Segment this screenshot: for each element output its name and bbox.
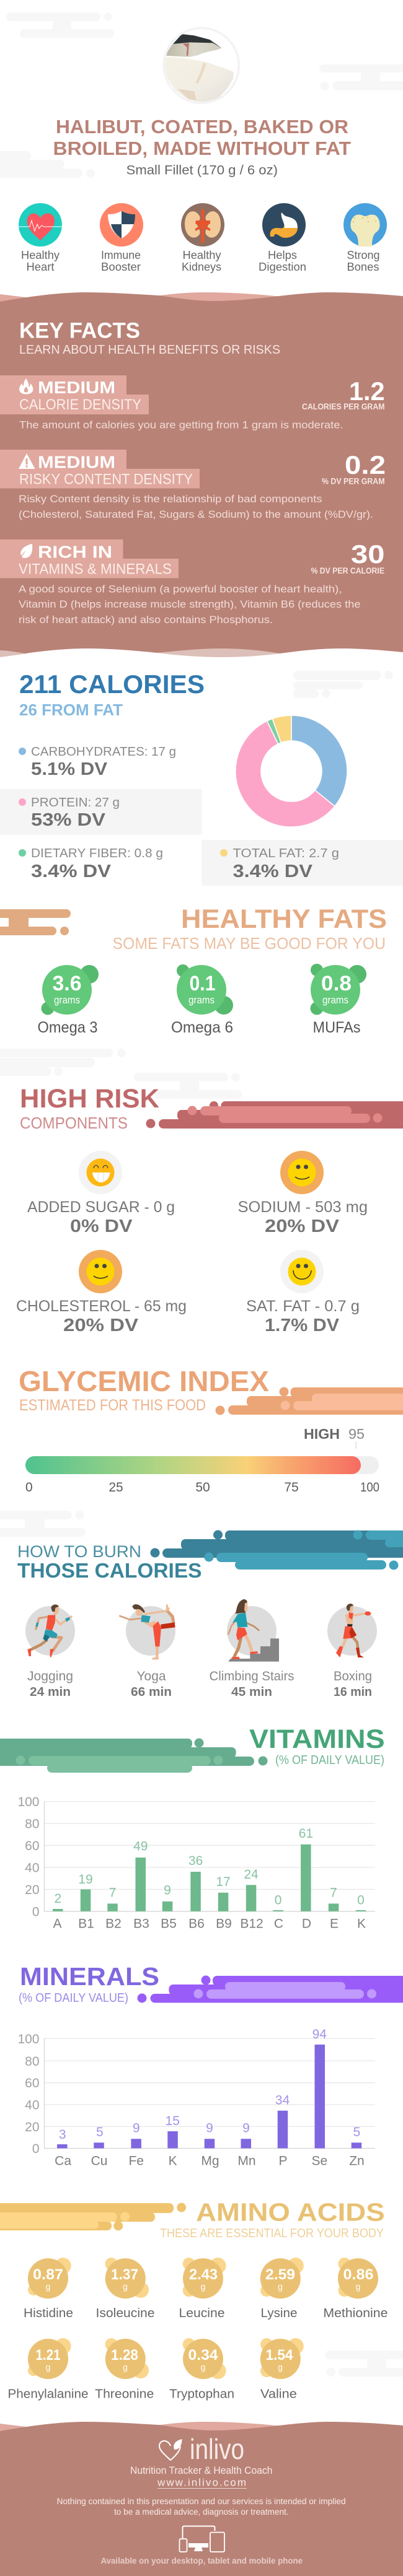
bar chart: vitamins: 80 bbox=[25, 1817, 40, 1831]
level: medium risky content: MEDIUM bbox=[38, 452, 115, 472]
bar chart: minerals: Mg bbox=[201, 2154, 219, 2168]
nutrient: total fat bbox=[202, 840, 403, 886]
glycemic gauge: 25 bbox=[108, 1480, 123, 1495]
nutrient: dietary fiber: 3.4% DV bbox=[31, 862, 112, 881]
amino: methionine: Methionine bbox=[323, 2307, 388, 2320]
amino: isoleucine: g bbox=[123, 2282, 128, 2292]
background cloud: burn calories bbox=[0, 1511, 86, 1537]
bar chart: vitamins: 24 bbox=[244, 1867, 259, 1882]
label: boxing: Boxing bbox=[334, 1669, 372, 1683]
label: yoga: 66 min bbox=[131, 1685, 172, 1699]
label: healthy heart: Healthy bbox=[21, 249, 60, 261]
amino: phenylalanine: 1.21 bbox=[36, 2347, 61, 2364]
bar chart: vitamins: 0 bbox=[275, 1893, 281, 1908]
subheading: calories from fat: 26 FROM FAT bbox=[19, 701, 123, 719]
label: boxing bbox=[334, 1669, 372, 1699]
risk item: cholesterol bbox=[16, 1250, 187, 1335]
amino: phenylalanine bbox=[7, 2338, 88, 2401]
label: climbing stairs: Climbing Stairs bbox=[210, 1669, 294, 1683]
bar chart: vitamins: B5 bbox=[161, 1917, 177, 1931]
amino: phenylalanine: Phenylalanine bbox=[7, 2388, 88, 2401]
bar chart: minerals: 9 bbox=[242, 2121, 250, 2136]
amino: isoleucine: Isoleucine bbox=[95, 2307, 155, 2320]
risk item: sodium bbox=[238, 1151, 368, 1236]
bar chart: vitamins: 17 bbox=[216, 1875, 231, 1889]
bar chart: minerals: Fe bbox=[128, 2154, 144, 2168]
amino: valine: 1.54 bbox=[265, 2347, 293, 2364]
text: risky content description: (Cholesterol, Saturated Fat, Sugars & Sodium) to the amount (%DV/gr). bbox=[19, 509, 373, 520]
label: healthy heart bbox=[21, 249, 60, 273]
bar chart: vitamins: 7 bbox=[330, 1885, 337, 1900]
heading: glycemic index: GLYCEMIC INDEX bbox=[19, 1365, 269, 1397]
panel: footer bbox=[0, 2422, 403, 2576]
bar chart: vitamins: B1 bbox=[78, 1917, 94, 1931]
amino: phenylalanine: g bbox=[46, 2362, 50, 2372]
band: risky content density bbox=[0, 450, 200, 488]
amino: lysine: 2.59 bbox=[265, 2266, 295, 2283]
label: boxing: 16 min bbox=[334, 1685, 372, 1699]
bar chart: minerals: 5 bbox=[353, 2125, 360, 2139]
label: healthy kidneys bbox=[182, 249, 221, 273]
bar chart: vitamins: 60 bbox=[25, 1839, 40, 1853]
label: jogging: Jogging bbox=[27, 1669, 73, 1683]
label: immune booster: Booster bbox=[101, 261, 141, 273]
amino: methionine bbox=[323, 2258, 388, 2320]
disclaimer: to be a medical advice, diagnosis or treatment. bbox=[114, 2507, 289, 2517]
bar chart: minerals: 94 bbox=[312, 2027, 327, 2041]
risk item: sodium: SODIUM - 503 mg bbox=[238, 1198, 368, 1216]
ribbon: healthy fats bbox=[0, 909, 71, 935]
bar chart: minerals: 80 bbox=[25, 2054, 40, 2069]
band: vitamins and minerals bbox=[0, 539, 179, 579]
ribbon: vitamins bbox=[0, 1738, 268, 1773]
amino: threonine bbox=[95, 2338, 154, 2401]
disclaimer bbox=[57, 2497, 346, 2517]
risk item: saturated fat: 1.7% DV bbox=[265, 1316, 340, 1335]
label: calorie density: CALORIE DENSITY bbox=[19, 396, 141, 413]
text: calorie density description: The amount of calories you are getting from 1 gram is moderate. bbox=[19, 420, 343, 431]
level: rich in: RICH IN bbox=[38, 543, 112, 561]
unit: percent DV per calorie: % DV PER CALORIE bbox=[311, 566, 384, 575]
label: helps digestion: Helps bbox=[268, 249, 297, 261]
nutrient: dietary fiber bbox=[19, 847, 163, 881]
fat badge: omega 3: 3.6 bbox=[52, 972, 82, 995]
bar chart: vitamins: 20 bbox=[25, 1883, 40, 1897]
bar chart: vitamins: C bbox=[274, 1917, 283, 1931]
label: helps digestion: Digestion bbox=[259, 261, 306, 273]
photo: halibut fillet bbox=[164, 28, 239, 103]
icon: warning triangle bbox=[19, 453, 35, 469]
risk item: cholesterol: CHOLESTEROL - 65 mg bbox=[16, 1298, 187, 1315]
amino: tryptophan: Tryptophan bbox=[169, 2388, 234, 2401]
nutrient: protein bbox=[0, 789, 202, 835]
bar chart: minerals: 9 bbox=[206, 2121, 213, 2136]
bar chart: minerals: Mn bbox=[237, 2154, 256, 2168]
bar chart: minerals: Se bbox=[312, 2154, 327, 2168]
glycemic value bbox=[304, 1426, 365, 1442]
text: vitamins and minerals description bbox=[19, 583, 361, 626]
label: strong bones: Bones bbox=[347, 261, 379, 273]
bar chart: minerals: P bbox=[278, 2154, 288, 2168]
label: strong bones bbox=[347, 249, 379, 273]
band: calorie density bbox=[0, 375, 149, 414]
heading: calories: 211 CALORIES bbox=[19, 670, 205, 699]
availability note: Available on your desktop, tablet and mobile phone bbox=[100, 2556, 303, 2565]
ribbon: minerals bbox=[138, 1976, 403, 2003]
panel: key facts bbox=[0, 292, 403, 657]
icon: devices bbox=[180, 2526, 224, 2552]
icon: healthy heart bbox=[19, 203, 62, 247]
title bbox=[53, 116, 351, 159]
amino: isoleucine: 1.37 bbox=[111, 2266, 138, 2283]
bar chart: vitamins: 7 bbox=[109, 1885, 116, 1900]
icon: leaf bbox=[20, 544, 32, 558]
logo: inlivo heart and leaf bbox=[159, 2439, 182, 2460]
bar chart: vitamins: 61 bbox=[299, 1827, 313, 1841]
title: HALIBUT, COATED, BAKED OR bbox=[56, 116, 348, 138]
bar chart: minerals: 9 bbox=[133, 2121, 140, 2136]
bar chart: minerals: 20 bbox=[25, 2120, 40, 2134]
ribbon: burn calories bbox=[150, 1530, 403, 1570]
text: risky content description: Risky Content density is the relationship of bad components bbox=[19, 494, 322, 505]
amino: threonine: Threonine bbox=[95, 2388, 154, 2401]
unit: percent DV per gram: % DV PER GRAM bbox=[322, 477, 384, 486]
subheading: healthy fats: SOME FATS MAY BE GOOD FOR YOU bbox=[113, 934, 386, 953]
exercise: climbing stairs bbox=[227, 1599, 279, 1662]
exercise: jogging bbox=[25, 1605, 75, 1657]
bar chart: vitamins: 0 bbox=[357, 1893, 365, 1908]
label: helps digestion bbox=[259, 249, 306, 273]
amino: leucine: Leucine bbox=[179, 2307, 224, 2320]
tagline: Nutrition Tracker & Health Coach bbox=[130, 2465, 273, 2476]
fat badge: omega 3: grams bbox=[54, 994, 80, 1006]
background cloud: high risk left bbox=[0, 1049, 126, 1076]
bar chart: minerals: 40 bbox=[25, 2098, 40, 2112]
label: immune booster: Immune bbox=[101, 249, 141, 261]
bar chart: vitamins: B2 bbox=[105, 1917, 122, 1931]
disclaimer: Nothing contained in this presentation and our services is intended or implied bbox=[57, 2497, 346, 2506]
label: healthy heart: Heart bbox=[26, 261, 55, 273]
risk item: added sugar: 0% DV bbox=[70, 1216, 133, 1236]
bar chart: vitamins bbox=[17, 1795, 375, 1931]
subheading: amino acids: THESE ARE ESSENTIAL FOR YOUR BODY bbox=[160, 2227, 384, 2240]
ribbon: high risk bbox=[146, 1101, 403, 1129]
label: jogging bbox=[27, 1669, 73, 1699]
amino: threonine: g bbox=[123, 2362, 128, 2372]
bar chart: vitamins: B9 bbox=[216, 1917, 232, 1931]
amino: tryptophan: 0.34 bbox=[188, 2347, 218, 2364]
glycemic gauge bbox=[25, 1442, 379, 1495]
fat badge: omega 3 bbox=[37, 965, 99, 1036]
background cloud: top right bbox=[319, 64, 403, 90]
amino: histidine: g bbox=[46, 2282, 50, 2292]
background cloud: top left bbox=[6, 12, 114, 38]
bar chart: vitamins: 49 bbox=[133, 1840, 148, 1853]
bar chart: minerals: Zn bbox=[349, 2154, 365, 2168]
glycemic gauge: 50 bbox=[195, 1480, 210, 1495]
icon: flame bbox=[19, 378, 33, 394]
bar chart: vitamins: 2 bbox=[54, 1892, 61, 1906]
amino: histidine: Histidine bbox=[24, 2307, 73, 2320]
risk item: saturated fat bbox=[246, 1250, 360, 1335]
glycemic value: HIGH bbox=[304, 1426, 340, 1442]
label: jogging: 24 min bbox=[30, 1685, 71, 1699]
bar chart: minerals: 34 bbox=[275, 2093, 290, 2107]
fat badge: omega 6: grams bbox=[188, 994, 215, 1006]
fat badge: omega 6: 0.1 bbox=[190, 972, 216, 995]
nutrient: protein: PROTEIN: 27 g bbox=[31, 796, 120, 810]
amino: threonine: 1.28 bbox=[111, 2347, 138, 2364]
website link: www.inlivo.com bbox=[157, 2477, 246, 2489]
bar chart: vitamins: 100 bbox=[17, 1795, 40, 1809]
amino: isoleucine bbox=[95, 2258, 155, 2320]
fat badge: MUFAs bbox=[310, 964, 366, 1036]
bar chart: minerals: K bbox=[169, 2154, 177, 2168]
heading: healthy fats: HEALTHY FATS bbox=[181, 904, 387, 934]
bar chart: vitamins: B12 bbox=[240, 1917, 264, 1931]
nutrient: total fat: 3.4% DV bbox=[233, 862, 313, 881]
logo wordmark: inlivo bbox=[190, 2433, 244, 2465]
nutrient: protein: 53% DV bbox=[31, 810, 106, 830]
risk item: added sugar bbox=[27, 1151, 175, 1236]
amino: lysine: Lysine bbox=[260, 2307, 298, 2320]
ribbon: amino acids bbox=[0, 2203, 186, 2230]
label: vitamins and minerals: VITAMINS & MINERALS bbox=[19, 561, 172, 577]
bar chart: vitamins: K bbox=[357, 1917, 366, 1931]
ribbon: glycemic index bbox=[216, 1387, 403, 1415]
exercise: yoga bbox=[120, 1604, 175, 1659]
fat badge: omega 3: Omega 3 bbox=[37, 1019, 98, 1036]
nutrient: carbohydrates: CARBOHYDRATES: 17 g bbox=[31, 745, 176, 759]
risk item: added sugar: ADDED SUGAR - 0 g bbox=[27, 1198, 175, 1216]
amino: leucine: g bbox=[201, 2282, 205, 2292]
serving size: Small Fillet (170 g / 6 oz) bbox=[126, 164, 278, 178]
glycemic gauge: 0 bbox=[25, 1480, 33, 1495]
icon: healthy kidneys bbox=[181, 203, 224, 247]
bar chart: vitamins: 9 bbox=[164, 1884, 171, 1898]
label: healthy kidneys: Kidneys bbox=[182, 261, 221, 273]
level: medium calorie density: MEDIUM bbox=[38, 378, 115, 397]
subheading: components: COMPONENTS bbox=[20, 1114, 128, 1132]
background cloud: calories bbox=[293, 671, 393, 698]
text: vitamins and minerals description: Vitamin D (helps increase muscle strength), Vitamin B6 (reduces the bbox=[19, 599, 361, 610]
nutrient: carbohydrates bbox=[19, 745, 176, 779]
risk item: cholesterol: 20% DV bbox=[63, 1316, 139, 1335]
heading: high risk: HIGH RISK bbox=[20, 1084, 159, 1114]
amino: valine: g bbox=[278, 2362, 283, 2372]
heading: key facts: KEY FACTS bbox=[19, 318, 140, 343]
glycemic gauge: 75 bbox=[284, 1480, 299, 1495]
bar chart: minerals: 15 bbox=[166, 2114, 180, 2128]
label: risky content density: RISKY CONTENT DENSITY bbox=[19, 471, 193, 488]
label: yoga: Yoga bbox=[136, 1669, 166, 1683]
icon: strong bones bbox=[343, 203, 387, 247]
amino: tryptophan: g bbox=[201, 2362, 205, 2372]
subheading: glycemic index: ESTIMATED FOR THIS FOOD bbox=[19, 1397, 206, 1414]
bar chart: vitamins: 36 bbox=[188, 1854, 203, 1868]
amino: valine: Valine bbox=[260, 2388, 297, 2401]
bar chart: minerals: 60 bbox=[25, 2076, 40, 2090]
bar chart: minerals: 3 bbox=[59, 2128, 66, 2142]
label: climbing stairs: 45 min bbox=[231, 1685, 272, 1699]
amino: lysine bbox=[260, 2258, 304, 2320]
subheading: minerals: (% OF DAILY VALUE) bbox=[19, 1991, 128, 2005]
icon: immune booster bbox=[100, 203, 143, 247]
fat badge: omega 6: Omega 6 bbox=[171, 1019, 233, 1036]
background cloud: high risk centre bbox=[134, 1073, 242, 1099]
bar chart: minerals bbox=[17, 2027, 375, 2168]
amino: tryptophan bbox=[169, 2338, 234, 2401]
donut chart: macronutrients bbox=[236, 715, 347, 827]
bar chart: vitamins: B3 bbox=[133, 1917, 149, 1931]
bar chart: vitamins: A bbox=[53, 1917, 62, 1931]
amino: histidine bbox=[24, 2258, 73, 2320]
amino: valine bbox=[260, 2338, 304, 2401]
text: vitamins and minerals description: risk of heart attack) and also contains Phosphorus. bbox=[19, 614, 273, 626]
fat badge: MUFAs: 0.8 bbox=[321, 972, 352, 995]
bar chart: minerals: 5 bbox=[96, 2125, 104, 2139]
heading: those calories: THOSE CALORIES bbox=[17, 1559, 202, 1582]
heading: vitamins: VITAMINS bbox=[249, 1724, 385, 1754]
value: calories per gram: 1.2 bbox=[349, 377, 384, 406]
glycemic gauge: 100 bbox=[360, 1480, 379, 1495]
bar chart: vitamins: 40 bbox=[25, 1861, 40, 1875]
amino: methionine: g bbox=[356, 2282, 360, 2292]
heading: how to burn: HOW TO BURN bbox=[17, 1542, 141, 1561]
subheading: vitamins: (% OF DAILY VALUE) bbox=[275, 1753, 384, 1767]
risk item: saturated fat: SAT. FAT - 0.7 g bbox=[246, 1298, 360, 1315]
bar chart: minerals: 0 bbox=[32, 2142, 40, 2156]
fat badge: omega 6 bbox=[171, 964, 233, 1036]
bar chart: vitamins: 0 bbox=[32, 1905, 40, 1919]
label: immune booster bbox=[101, 249, 141, 273]
value: percent DV per gram: 0.2 bbox=[345, 450, 386, 479]
glycemic value: 95 bbox=[348, 1426, 365, 1442]
label: strong bones: Strong bbox=[347, 249, 379, 261]
unit: calories per gram: CALORIES PER GRAM bbox=[302, 402, 384, 411]
nutrient: carbohydrates: 5.1% DV bbox=[31, 759, 108, 779]
heading: amino acids: AMINO ACIDS bbox=[196, 2198, 385, 2226]
amino: leucine: 2.43 bbox=[189, 2266, 218, 2283]
bar chart: vitamins: B6 bbox=[188, 1917, 205, 1931]
background cloud: amino acids bbox=[325, 2351, 403, 2377]
bar chart: minerals: 100 bbox=[17, 2032, 40, 2046]
bar chart: vitamins: 19 bbox=[78, 1872, 93, 1887]
amino: histidine: 0.87 bbox=[33, 2266, 63, 2283]
fat badge: MUFAs: MUFAs bbox=[312, 1019, 361, 1036]
amino: leucine bbox=[179, 2258, 226, 2320]
exercise: boxing bbox=[327, 1604, 377, 1657]
background cloud: title left bbox=[0, 151, 95, 178]
label: climbing stairs bbox=[210, 1669, 294, 1699]
label: healthy kidneys: Healthy bbox=[182, 249, 221, 261]
text: vitamins and minerals description: A good source of Selenium (a powerful booster of heart health), bbox=[19, 583, 342, 595]
subheading: key facts: LEARN ABOUT HEALTH BENEFITS OR RISKS bbox=[19, 343, 280, 357]
nutrient: total fat: TOTAL FAT: 2.7 g bbox=[233, 847, 339, 860]
bar chart: vitamins: D bbox=[302, 1917, 311, 1931]
heading: minerals: MINERALS bbox=[20, 1962, 159, 1991]
fat badge: MUFAs: grams bbox=[322, 994, 348, 1006]
amino: methionine: 0.86 bbox=[343, 2266, 373, 2283]
title: BROILED, MADE WITHOUT FAT bbox=[53, 138, 351, 159]
bar chart: minerals: Cu bbox=[91, 2154, 107, 2168]
nutrient: dietary fiber: DIETARY FIBER: 0.8 g bbox=[31, 847, 163, 860]
icon: helps digestion bbox=[262, 203, 306, 247]
label: yoga bbox=[131, 1669, 172, 1699]
bar chart: vitamins: E bbox=[330, 1917, 339, 1931]
amino: lysine: g bbox=[278, 2282, 283, 2292]
value: percent DV per calorie: 30 bbox=[351, 539, 384, 569]
bar chart: minerals: Ca bbox=[55, 2154, 71, 2168]
text: risky content description bbox=[19, 494, 373, 520]
risk item: sodium: 20% DV bbox=[265, 1216, 340, 1236]
